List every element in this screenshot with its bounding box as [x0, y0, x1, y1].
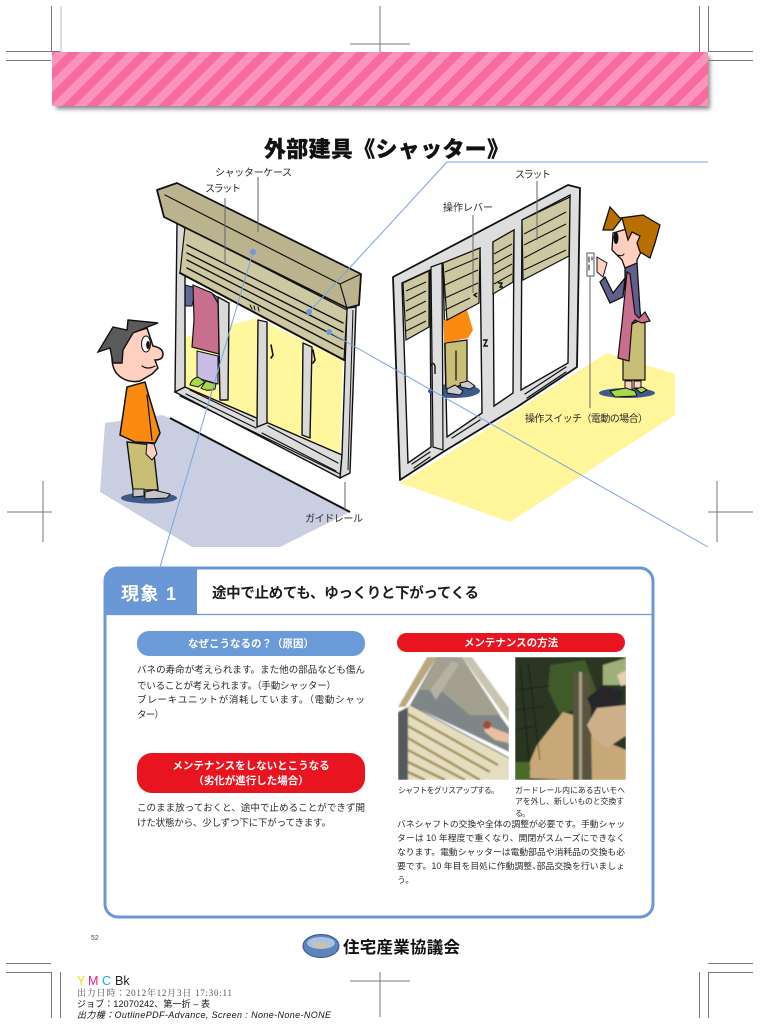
page number: 52 — [91, 935, 99, 942]
colour marks: M — [88, 974, 98, 988]
logo: HIA badge — [303, 934, 339, 958]
woman — [587, 207, 660, 398]
maintenance text — [397, 818, 625, 885]
man behind the window — [428, 263, 480, 450]
part labels: スラット — [515, 169, 551, 181]
slat panels — [403, 197, 570, 374]
header underline — [105, 614, 653, 616]
illustration: inside view with woman operating switch — [393, 185, 675, 522]
photo captions: ガードレール内にある古いモヘ — [515, 785, 625, 795]
centre post over shadow — [431, 263, 443, 450]
cause text: ター） — [137, 709, 164, 721]
maintenance pill — [397, 633, 625, 652]
part labels: 操作レバー — [443, 201, 493, 214]
print info: 出力機：OutlinePDF-Advance, Screen : None-None-NONE — [77, 1010, 332, 1020]
maintenance text: ターは 10 年程度で重くなり、開閉がスムーズにできなく — [397, 832, 625, 843]
photo captions — [398, 785, 625, 818]
consequence pill: メンテナンスをしないとこうなる — [172, 760, 330, 772]
part labels: ガイドレール — [305, 513, 363, 525]
shutter slats — [180, 227, 347, 360]
cause text: バネの寿命が考えられます。また他の部品なども傷ん — [137, 664, 365, 676]
consequence pill — [137, 753, 365, 793]
photo: greasing the shaft — [398, 657, 509, 780]
part labels: 操作スイッチ（電動の場合） — [525, 412, 648, 425]
leader lines — [225, 177, 590, 511]
cause text — [137, 664, 365, 721]
maintenance text: バネシャフトの交換や全体の調整が必要です。手動シャッ — [397, 818, 625, 829]
colour marks: C — [102, 974, 111, 988]
consequence text: このまま放っておくと、途中で止めることができず開 — [137, 802, 365, 814]
cause text: でいることが考えられます。（手動シャッター） — [137, 680, 336, 692]
floor: grey — [100, 415, 350, 547]
panel: phenomenon 1 — [105, 568, 653, 917]
part labels: スラット — [205, 183, 241, 195]
cause pill: なぜこうなるの？（原因） — [188, 637, 314, 650]
photo captions: シャフトをグリスアップする。 — [398, 785, 499, 795]
photo captions: る。 — [515, 809, 530, 818]
photo captions: アを外し、新しいものと交換す — [515, 796, 624, 806]
window interior — [178, 225, 347, 470]
part labels — [205, 167, 648, 525]
print info: ジョブ：12070242、第一折 – 表 — [77, 998, 210, 1009]
illustration: closed-from-outside shutter view with boy — [98, 183, 361, 547]
boy — [98, 320, 177, 504]
organisation name: 住宅産業協議会 — [343, 938, 460, 957]
consequence pill: （劣化が進行した場合） — [193, 774, 309, 787]
decorative pink striped header band — [52, 52, 710, 109]
consequence text: けた状態から、少しずつ下に下がってきます。 — [137, 817, 331, 829]
window frame — [175, 223, 356, 478]
woman behind the window — [185, 285, 219, 390]
maintenance text: う。 — [397, 875, 414, 885]
cause text: ブレーキユニットが消耗しています。（電動シャッ — [137, 694, 365, 706]
colour marks: Bk — [115, 974, 130, 988]
blue connector lines — [160, 162, 708, 567]
consequence text — [137, 802, 365, 829]
tab label: 現象 1 — [121, 584, 176, 604]
panel heading: 途中で止めても、ゆっくりと下がってくる — [212, 584, 479, 602]
window frame right — [393, 185, 580, 480]
logo: HIA badge: HIA — [314, 941, 328, 950]
print info — [77, 974, 332, 1020]
panel header tab — [105, 568, 197, 614]
threshold line — [170, 418, 350, 512]
shutter case — [157, 183, 361, 308]
colour marks: Y — [77, 974, 86, 988]
floor: yellow — [400, 353, 675, 522]
photo: replacing guide rail mohair — [515, 657, 627, 780]
maintenance text: なります。電動シャッターは電動部品や消耗品の交換も必 — [397, 846, 625, 857]
cause pill — [137, 631, 365, 656]
maintenance text: 要です。10 年目を目処に作動調整､部品交換を行いましょ — [397, 860, 625, 871]
maintenance pill: メンテナンスの方法 — [464, 636, 559, 649]
print info: 出力日時：2012年12月3日 17:30:11 — [77, 987, 232, 998]
title: 外部建具《シャッター》 — [264, 137, 509, 162]
part labels: シャッターケース — [215, 167, 292, 179]
